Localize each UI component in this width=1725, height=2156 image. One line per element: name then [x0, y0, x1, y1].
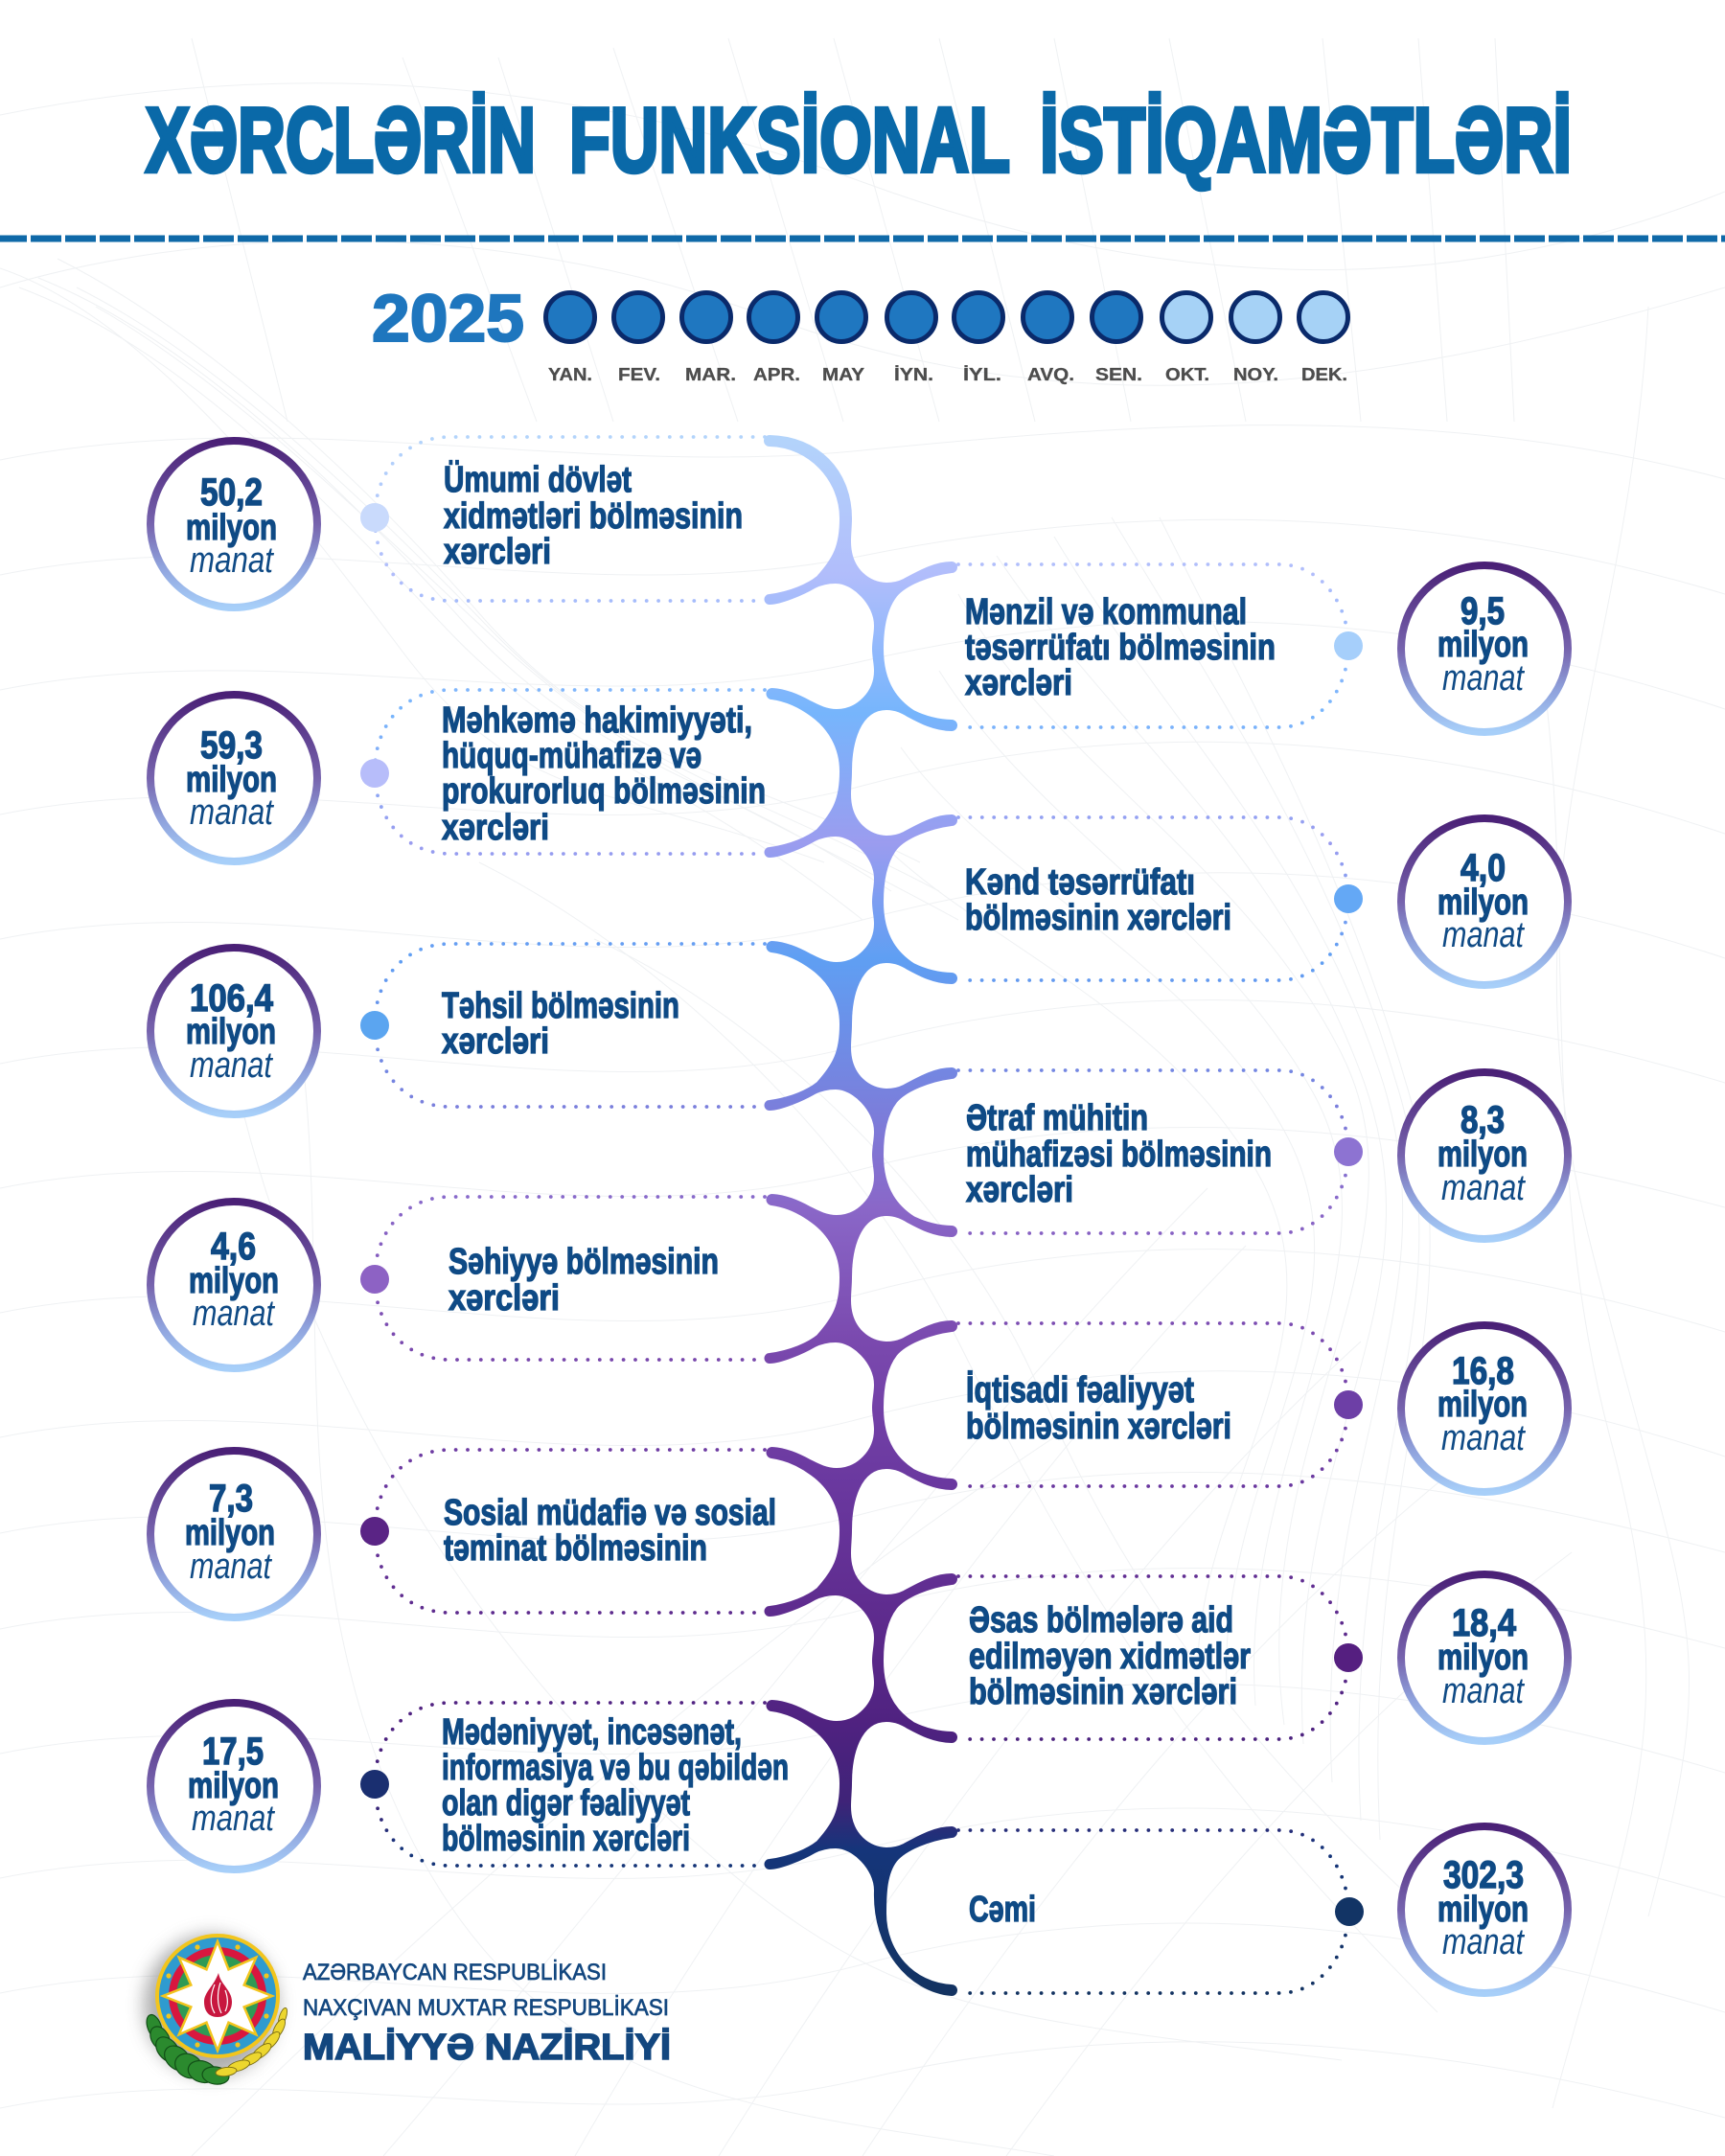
value badge: 106,4	[190, 977, 274, 1020]
dotted connector	[375, 1703, 765, 1866]
label: informasiya və bu qəbildən	[442, 1748, 789, 1788]
value badge: milyon	[188, 1766, 279, 1806]
dotted connector	[375, 1450, 765, 1613]
value badge: manat	[190, 540, 274, 581]
value badge: milyon	[186, 760, 277, 800]
marker dot	[1334, 1137, 1363, 1166]
value badge: 59,3	[200, 724, 263, 767]
label: xərcləri	[444, 532, 551, 572]
central branching spine	[765, 436, 956, 1995]
month labels: OKT.	[1165, 365, 1209, 384]
label	[444, 459, 743, 572]
label: Kənd təsərrüfatı	[965, 862, 1195, 903]
label: Sosial müdafiə və sosial	[444, 1493, 776, 1533]
label: İqtisadi fəaliyyət	[966, 1370, 1194, 1411]
label: bölməsinin xərcləri	[442, 1819, 690, 1859]
label: Məhkəmə hakimiyyəti,	[442, 700, 752, 741]
dotted connector	[958, 1576, 1348, 1739]
value badge: manat	[1442, 658, 1525, 699]
label: bölməsinin xərcləri	[969, 1672, 1237, 1712]
marker dot	[1335, 1897, 1364, 1926]
label: xərcləri	[448, 1278, 560, 1319]
value badge	[1401, 565, 1568, 732]
year: 2025	[372, 281, 524, 356]
value badge: milyon	[1438, 1638, 1529, 1678]
label: olan digər fəaliyyət	[442, 1783, 690, 1823]
value badge: 302,3	[1443, 1854, 1524, 1896]
value badge: milyon	[1438, 1135, 1528, 1175]
dotted connector	[958, 1830, 1348, 1993]
value badge: milyon	[1438, 1890, 1529, 1930]
label	[442, 986, 679, 1062]
dotted connector	[958, 817, 1348, 980]
value badge: 7,3	[209, 1478, 253, 1520]
value badge: 17,5	[202, 1731, 264, 1773]
label: xərcləri	[965, 663, 1072, 703]
marker dot	[360, 503, 389, 532]
panel: housing and communal	[958, 564, 1568, 732]
value badge: milyon	[1438, 883, 1529, 923]
value badge: manat	[190, 792, 274, 833]
label: Mədəniyyət, incəsənət,	[442, 1712, 742, 1753]
panel: agriculture	[958, 817, 1568, 985]
label: Ətraf mühitin	[966, 1098, 1148, 1138]
value badge: 9,5	[1460, 590, 1505, 632]
label: təsərrüfatı bölməsinin	[965, 628, 1276, 668]
panel: total	[958, 1826, 1568, 1993]
title: FUNKSİONAL	[569, 89, 1010, 192]
value badge: 16,8	[1452, 1350, 1514, 1392]
panel: courts and prosecution	[150, 690, 766, 861]
label	[965, 862, 1231, 938]
organisation name	[303, 1960, 671, 2068]
month labels: APR.	[753, 365, 800, 384]
marker dot	[360, 1517, 389, 1546]
marker dot	[360, 1011, 389, 1040]
marker dot	[1334, 1390, 1363, 1419]
value badge	[150, 441, 317, 608]
value badge: 4,6	[211, 1226, 256, 1268]
marker dot	[1334, 884, 1363, 913]
label: Mənzil və kommunal	[965, 592, 1247, 632]
label: bölməsinin xərcləri	[966, 1407, 1231, 1447]
marker dot	[360, 759, 389, 788]
label: Təhsil bölməsinin	[442, 986, 679, 1026]
value badge	[150, 1703, 317, 1869]
value badge: milyon	[1438, 625, 1529, 665]
panel: education	[150, 944, 765, 1114]
dotted connector	[958, 1323, 1348, 1486]
dotted connector	[375, 1197, 765, 1360]
label	[442, 700, 766, 848]
month labels: NOY.	[1233, 365, 1278, 384]
month labels: AVQ.	[1027, 365, 1074, 384]
label	[969, 1600, 1251, 1712]
value badge: milyon	[185, 1513, 275, 1553]
dotted connector	[375, 690, 765, 854]
label	[448, 1242, 719, 1319]
label: xərcləri	[442, 1021, 549, 1062]
month labels	[548, 365, 1347, 384]
value badge: 4,0	[1460, 847, 1506, 889]
month labels: İYL.	[963, 365, 1001, 384]
panel: general state services	[150, 437, 765, 608]
organisation name: NAXÇIVAN MUXTAR RESPUBLİKASI	[303, 1995, 669, 2021]
panel: social protection	[150, 1450, 776, 1617]
value badge: manat	[1442, 915, 1525, 955]
value badge: manat	[1442, 1922, 1525, 1962]
month labels: DEK.	[1301, 365, 1347, 384]
value badge: milyon	[186, 1012, 276, 1052]
month labels: MAY	[822, 365, 864, 384]
value badge	[150, 695, 317, 861]
label	[442, 1712, 789, 1859]
label: bölməsinin xərcləri	[965, 898, 1231, 938]
label: Cəmi	[969, 1890, 1036, 1930]
value badge: 8,3	[1460, 1099, 1505, 1141]
month labels: YAN.	[548, 365, 592, 384]
dotted connector	[375, 944, 765, 1107]
label: prokurorluq bölməsinin	[442, 771, 766, 812]
value badge	[1401, 1325, 1568, 1492]
panel: culture and information	[150, 1703, 789, 1869]
label: xərcləri	[442, 808, 549, 848]
value badge: manat	[190, 1045, 273, 1086]
label: Ümumi dövlət	[444, 459, 632, 500]
title: XƏRCLƏRİN	[146, 89, 536, 192]
value badge: milyon	[186, 508, 277, 548]
organisation name: AZƏRBAYCAN RESPUBLİKASI	[303, 1960, 607, 1985]
value badge: 50,2	[200, 471, 263, 514]
label: edilməyən xidmətlər	[969, 1637, 1251, 1677]
value badge: manat	[190, 1547, 272, 1587]
dotted connector	[958, 1070, 1348, 1233]
month indicators	[546, 293, 1347, 341]
dotted connector	[958, 564, 1348, 727]
value badge	[1401, 1072, 1568, 1239]
label: hüquq-mühafizə və	[442, 736, 702, 776]
label	[966, 1370, 1231, 1447]
label: xərcləri	[966, 1170, 1073, 1210]
value badge: manat	[1441, 1418, 1526, 1458]
month labels: İYN.	[894, 365, 933, 384]
dotted connector	[375, 437, 765, 601]
label: Əsas bölmələrə aid	[969, 1600, 1233, 1640]
value badge: 18,4	[1452, 1602, 1517, 1644]
panel: unclassified services	[958, 1574, 1568, 1741]
marker dot	[1334, 631, 1363, 660]
value badge: milyon	[189, 1261, 279, 1301]
month labels: MAR.	[685, 365, 736, 384]
value badge	[150, 1202, 317, 1368]
value badge: manat	[192, 1799, 275, 1839]
panel: health	[150, 1197, 765, 1368]
month labels: SEN.	[1095, 365, 1142, 384]
marker dot	[360, 1265, 389, 1294]
value badge: manat	[193, 1294, 275, 1334]
label: Səhiyyə bölməsinin	[448, 1242, 719, 1282]
panel: economic activity	[958, 1323, 1568, 1492]
value badge	[1401, 818, 1568, 985]
panel: environment	[958, 1070, 1568, 1239]
value badge: manat	[1442, 1671, 1525, 1711]
value badge	[150, 1451, 317, 1617]
value badge: milyon	[1438, 1385, 1528, 1425]
month labels: FEV.	[618, 365, 660, 384]
value badge	[1401, 1574, 1568, 1741]
organisation name: MALİYYƏ NAZİRLİYİ	[303, 2028, 671, 2068]
value badge	[1401, 1826, 1568, 1993]
marker dot	[1334, 1643, 1363, 1672]
value badge: manat	[1441, 1168, 1526, 1208]
label: mühafizəsi bölməsinin	[966, 1135, 1272, 1175]
value badge	[150, 948, 317, 1114]
icon: national emblem	[144, 1935, 288, 2086]
marker dot	[360, 1770, 389, 1799]
label: təminat bölməsinin	[444, 1528, 707, 1569]
label: xidmətləri bölməsinin	[444, 496, 743, 537]
label	[966, 1098, 1272, 1210]
title	[146, 89, 1572, 192]
year and month timeline	[372, 281, 1347, 384]
label	[965, 592, 1276, 703]
label	[444, 1493, 776, 1569]
